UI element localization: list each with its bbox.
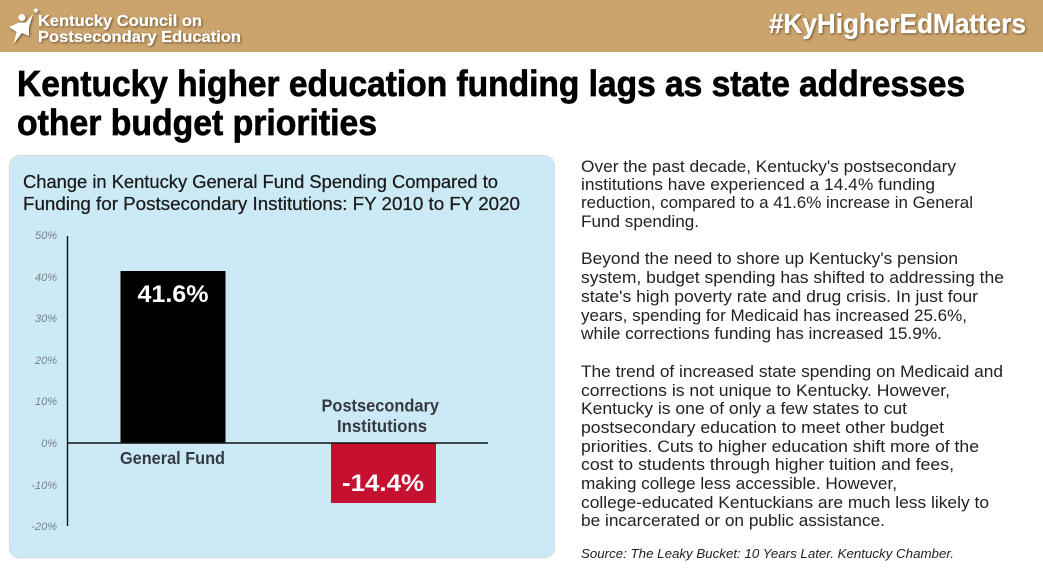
- bar: General Fund: [120, 271, 226, 443]
- hashtag: #KyHigherEdMatters: [769, 8, 1026, 39]
- text block: paragraph 3: college-educated Kentuckians are much less likely to: [581, 494, 989, 512]
- chart title: Funding for Postsecondary Institutions: FY 2010 to FY 2020: [23, 193, 520, 214]
- header band: [0, 0, 1043, 52]
- y axis labels: 50%: [35, 230, 57, 242]
- text block: paragraph 1: Fund spending.: [581, 213, 699, 231]
- text block: paragraph 3: making college less accessible. However,: [581, 475, 897, 493]
- main title: [17, 63, 965, 143]
- label: Postsecondary Institutions: [322, 396, 439, 436]
- y axis labels: 20%: [34, 355, 57, 367]
- text block: paragraph 3: cost to students through higher tuition and fees,: [581, 456, 954, 474]
- logo: [9, 7, 241, 46]
- chart title: [23, 171, 520, 214]
- text block: paragraph 1: institutions have experienced a 14.4% funding: [581, 176, 935, 194]
- logo text: [38, 13, 241, 46]
- label: Postsecondary Institutions: Postsecondary: [322, 396, 439, 416]
- label: Postsecondary Institutions: Institutions: [337, 416, 427, 436]
- text block: paragraph 3: Kentucky is one of only a few states to cut: [581, 400, 907, 418]
- text block: paragraph 3: corrections is not unique to Kentucky. However,: [581, 382, 950, 400]
- text block: paragraph 3: priorities. Cuts to higher education shift more of the: [581, 438, 979, 456]
- chart title: Change in Kentucky General Fund Spending Compared to: [23, 171, 498, 192]
- text block: paragraph 2: Beyond the need to shore up Kentucky's pension: [581, 250, 958, 268]
- y axis labels: 0%: [41, 438, 57, 450]
- bar: Postsecondary Institutions: -14.4%: [342, 470, 424, 497]
- text block: paragraph 2: system, budget spending has shifted to addressing the: [581, 269, 1004, 287]
- main title: other budget priorities: [17, 102, 377, 143]
- bar: Postsecondary Institutions: [331, 444, 436, 503]
- panel: chart: [10, 156, 554, 558]
- text block: paragraph 1: Over the past decade, Kentucky's postsecondary: [581, 158, 957, 176]
- y axis labels: -10%: [31, 480, 57, 492]
- text block: paragraph 2: years, spending for Medicaid has increased 25.6%,: [581, 307, 967, 325]
- y axis labels: [31, 230, 57, 533]
- text block: paragraph 2: while corrections funding has increased 15.9%.: [580, 325, 942, 343]
- y axis labels: 40%: [35, 272, 57, 284]
- y axis labels: 30%: [35, 313, 57, 325]
- text block: paragraph 3: The trend of increased state spending on Medicaid and: [581, 363, 1003, 381]
- bar: General Fund: 41.6%: [138, 281, 209, 308]
- main title: Kentucky higher education funding lags as state addresses: [17, 63, 965, 104]
- source note: Source: The Leaky Bucket: 10 Years Later. Kentucky Chamber.: [581, 546, 954, 561]
- text block: paragraph 3: [581, 363, 1003, 530]
- text block: paragraph 2: [580, 250, 1004, 343]
- y axis labels: 10%: [35, 396, 57, 408]
- text block: paragraph 1: reduction, compared to a 41.6% increase in General: [581, 194, 973, 212]
- axes: [67, 236, 488, 526]
- text block: paragraph 3: be incarcerated or on public assistance.: [581, 512, 885, 530]
- label: General Fund: General Fund: [120, 448, 225, 468]
- y axis labels: -20%: [31, 521, 57, 533]
- icon: star figure: [9, 7, 39, 44]
- logo text: Postsecondary Education: [38, 29, 241, 46]
- text block: paragraph 3: postsecondary education to meet other budget: [581, 419, 944, 437]
- text block: paragraph 2: state's high poverty rate and drug crisis. In just four: [581, 288, 979, 306]
- logo text: Kentucky Council on: [38, 13, 202, 30]
- text block: paragraph 1: [581, 158, 973, 231]
